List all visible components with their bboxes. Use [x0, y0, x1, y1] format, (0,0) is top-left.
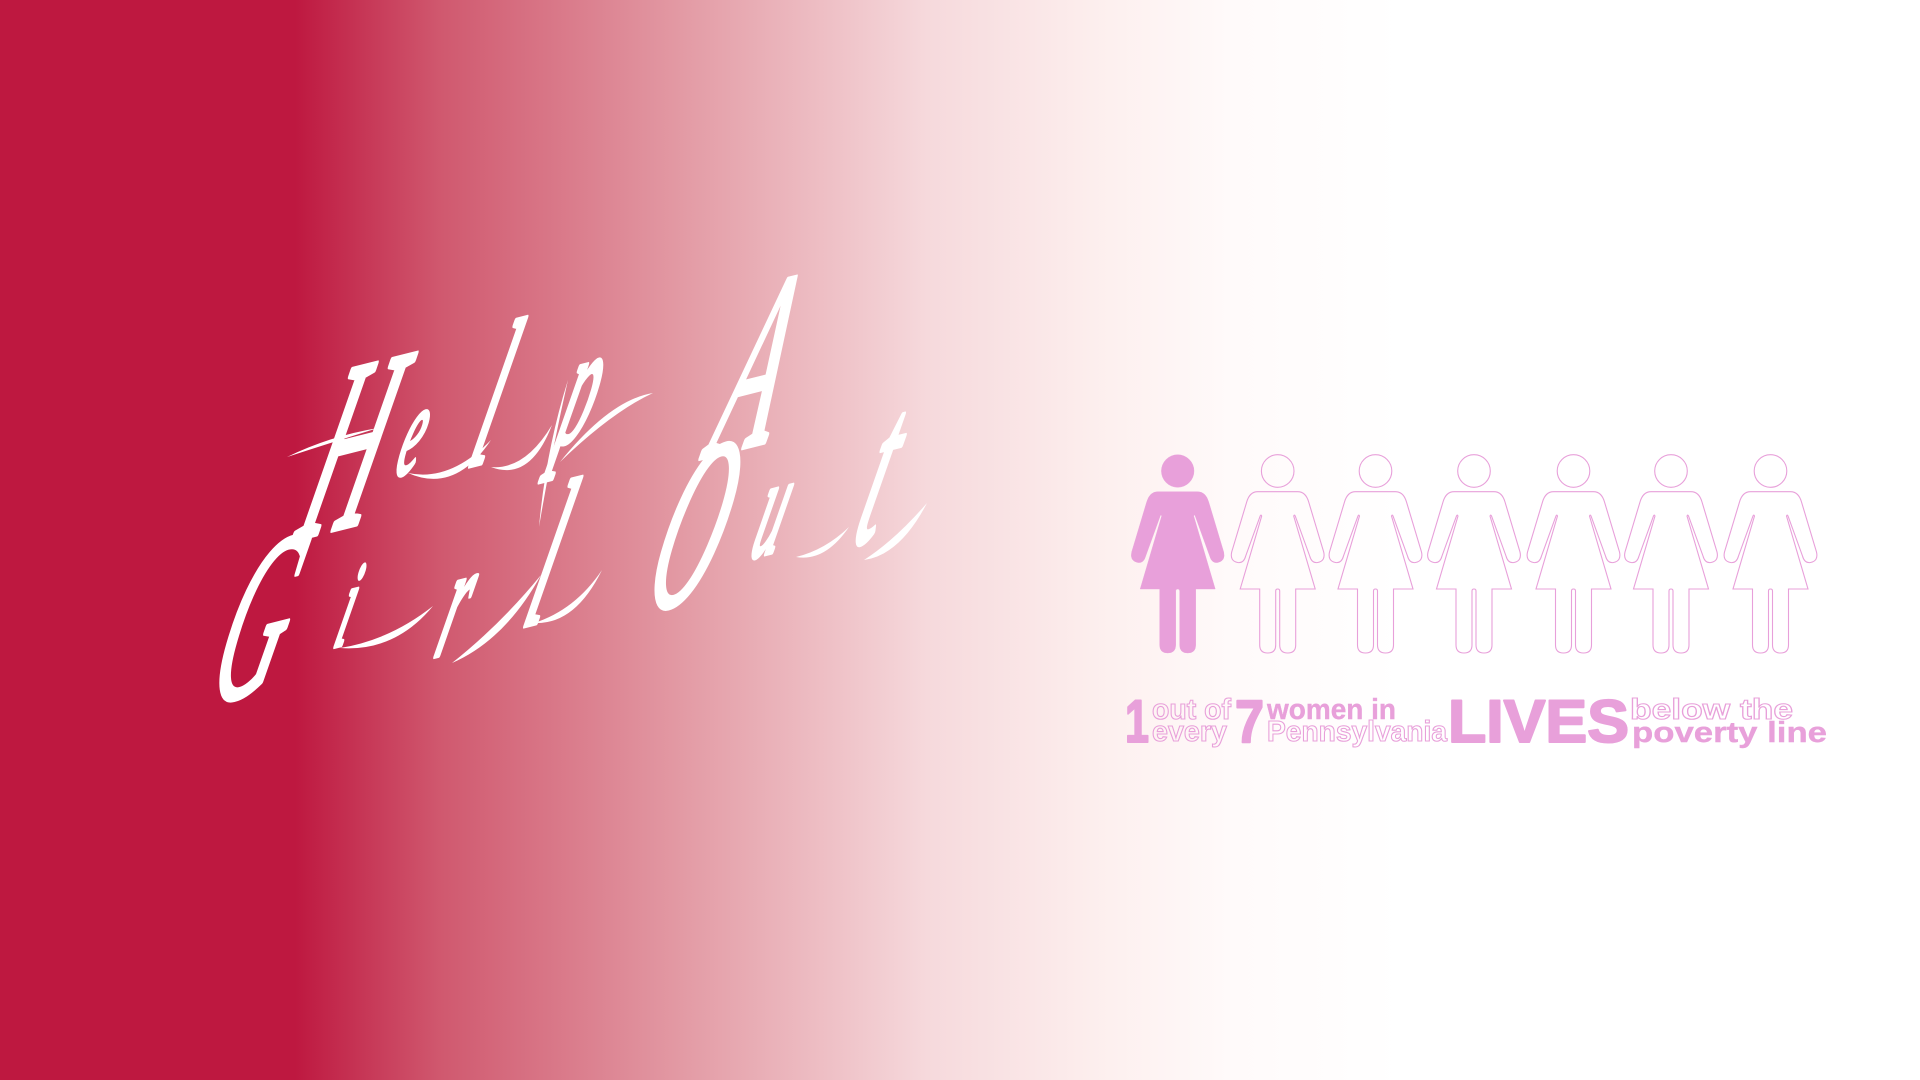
statistic caption	[1125, 688, 1827, 755]
icon: outlined woman 4	[1428, 455, 1520, 653]
numeral 7: 7	[1235, 688, 1264, 755]
title line: Help A: A	[683, 213, 832, 514]
caption: women in Pennsylvania: Pennsylvania	[1267, 716, 1448, 748]
decorative swashes linking the title letters	[287, 380, 927, 663]
caption: out of every	[1152, 694, 1231, 748]
title line: Girl Out: G	[190, 479, 331, 757]
caption: below the poverty line	[1630, 694, 1827, 749]
title line: Help A: H	[276, 292, 435, 596]
caption: women in Pennsylvania: women in	[1266, 694, 1396, 726]
caption: women in Pennsylvania	[1266, 694, 1448, 748]
numeral 1: 1	[1125, 688, 1149, 755]
title line: Help A: p	[539, 287, 629, 483]
title line: Girl Out: l	[507, 437, 595, 673]
icon: outlined woman 7	[1724, 455, 1817, 653]
title line: Girl Out: t	[836, 341, 933, 594]
caption: out of every: out of	[1152, 694, 1231, 726]
pictogram row: 1 of 7 women	[1131, 455, 1817, 653]
title line: Help A: e	[385, 356, 448, 504]
icon: outlined woman 2	[1231, 455, 1324, 653]
icon: outlined woman 6	[1625, 455, 1717, 653]
caption: out of every: every	[1152, 716, 1227, 748]
icon: outlined woman 3	[1329, 455, 1422, 653]
caption: below the poverty line: below the	[1630, 694, 1793, 726]
icon: filled woman	[1131, 455, 1224, 653]
title line: Help A: l	[452, 277, 540, 513]
title line: Girl Out: i	[324, 538, 375, 674]
title line: Girl Out: u	[739, 423, 813, 590]
title line: Girl Out: r	[422, 510, 497, 692]
title line: Girl Out: O	[625, 382, 769, 665]
word: LIVES: LIVES	[1448, 688, 1629, 755]
icon: outlined woman 5	[1527, 455, 1620, 653]
title: Help A Girl Out	[185, 155, 987, 775]
caption: below the poverty line: poverty line	[1632, 717, 1827, 749]
